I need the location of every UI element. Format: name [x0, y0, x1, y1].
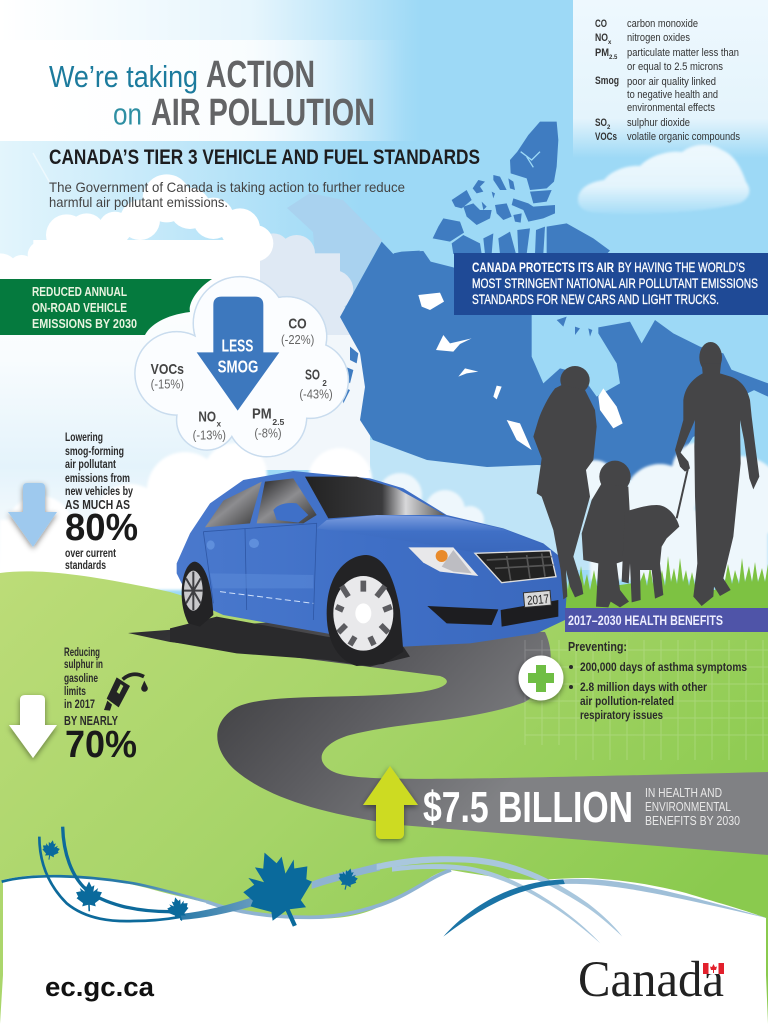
cloud: behind car and family	[0, 442, 768, 590]
panel: glossary: or equal to 2.5 microns	[627, 61, 723, 73]
car mirror	[273, 503, 308, 523]
panel: glossary: CO	[595, 18, 607, 30]
less smog arrow: SMOG	[218, 357, 258, 377]
VOCs value: (-15%)	[151, 376, 184, 391]
man	[675, 342, 759, 606]
Canada wordmark: Canada	[578, 952, 724, 1008]
car windshield	[305, 477, 445, 518]
panel: glossary: PM	[595, 47, 609, 59]
panel: glossary: volatile organic compounds	[627, 131, 740, 143]
text: reducing sulphur 70%: sulphur in	[64, 659, 103, 671]
arrow: light blue down	[8, 483, 57, 547]
translucent map: Alaska	[287, 193, 382, 318]
grass	[565, 556, 768, 610]
text: preventing list: Preventing:	[568, 639, 627, 654]
footer white wave	[0, 870, 768, 1024]
less smog arrow	[197, 297, 279, 411]
map of Canada	[340, 223, 768, 487]
banner: reduced annual emissions: EMISSIONS BY 2030	[32, 316, 137, 331]
less smog arrow: LESS	[222, 336, 253, 356]
car details	[203, 523, 317, 620]
leash	[677, 467, 688, 518]
car	[170, 471, 567, 667]
car hood	[317, 515, 547, 552]
panel: glossary: nitrogen oxides	[627, 32, 690, 44]
text: lowering emissions 80%: air pollutant	[65, 459, 116, 471]
text: lowering emissions 80%: over current	[65, 548, 116, 560]
CO value	[281, 315, 314, 347]
text: preventing list: respiratory issues	[580, 708, 663, 722]
NOx value: x	[217, 420, 222, 429]
Arctic islands	[393, 122, 558, 258]
panel: glossary: 2.5	[609, 55, 618, 61]
text: 7.5 billion benefits: $7.5 BILLION	[423, 783, 633, 832]
panel: glossary: SO	[595, 117, 607, 129]
swooshes	[2, 827, 768, 943]
panel: glossary: particulate matter less than	[627, 47, 739, 59]
intro text: The Government of Canada is taking action to further reduce	[49, 179, 405, 195]
SO2 value	[299, 366, 333, 401]
VOCs value: VOCs	[151, 361, 184, 378]
title: ACTION	[206, 54, 315, 96]
NOx value: NO	[198, 409, 216, 426]
licence plate: 2017	[527, 592, 550, 608]
banner: reduced annual emissions	[0, 279, 212, 335]
intro text	[49, 179, 405, 210]
PM2.5 value: 2.5	[272, 418, 285, 427]
car body	[177, 471, 567, 647]
car front side window	[257, 478, 317, 523]
ground	[0, 571, 768, 1024]
title	[49, 54, 375, 134]
car rear window	[205, 482, 262, 527]
text: 7.5 billion benefits: BENEFITS BY 2030	[645, 813, 740, 828]
road	[128, 620, 768, 855]
icon: green plus	[518, 656, 564, 700]
title: on	[113, 96, 142, 132]
panel: glossary	[573, 0, 768, 158]
intro text: harmful air pollutant emissions.	[49, 194, 228, 210]
woman	[533, 366, 597, 599]
pale haze on the left	[0, 266, 370, 575]
panel: Canada protects its air	[454, 253, 768, 315]
car shadow	[170, 617, 410, 667]
family silhouettes	[533, 342, 759, 607]
text: reducing sulphur 70%: gasoline	[64, 673, 98, 685]
VOCs value	[151, 361, 184, 391]
arrow: lime up	[363, 766, 418, 839]
PM2.5 value: (-8%)	[254, 426, 282, 441]
panel: glossary: Smog	[595, 75, 619, 87]
text: lowering emissions 80%: standards	[65, 560, 106, 572]
title: We’re taking	[49, 59, 198, 94]
PM2.5 value	[252, 405, 285, 441]
text: reducing sulphur 70%: BY NEARLY	[64, 713, 118, 728]
panel: glossary: NO	[595, 32, 608, 44]
panel: Canada protects its air: CANADA PROTECTS ITS AIR	[472, 260, 614, 275]
text: preventing list: air pollution-related	[580, 694, 674, 708]
smog cloud chart	[135, 277, 348, 457]
panel: glossary: x	[608, 40, 612, 46]
text: 7.5 billion benefits: IN HEALTH AND	[645, 785, 722, 800]
text: preventing list	[568, 639, 747, 722]
car headlight	[408, 547, 478, 576]
text: reducing sulphur 70%: Reducing	[64, 647, 100, 659]
car lower vents	[427, 600, 558, 627]
banner: reduced annual emissions: ON-ROAD VEHICLE	[32, 300, 127, 315]
text: preventing list: 2.8 million days with other	[580, 680, 707, 694]
text: lowering emissions 80%	[65, 432, 138, 572]
title: AIR POLLUTION	[151, 92, 375, 134]
text: 7.5 billion benefits: ENVIRONMENTAL	[645, 799, 731, 814]
banner: health benefits: 2017–2030 HEALTH BENEFITS	[568, 613, 723, 628]
panel: glossary: environmental effects	[627, 102, 715, 114]
panel: glossary: VOCs	[595, 131, 617, 143]
CO value: CO	[288, 315, 307, 332]
text: lowering emissions 80%: 80%	[65, 507, 138, 549]
panel: glossary: carbon monoxide	[627, 18, 698, 30]
CO value: (-22%)	[281, 332, 314, 347]
subtitle: CANADA’S TIER 3 VEHICLE AND FUEL STANDARDS	[49, 146, 480, 169]
panel: glossary: poor air quality linked	[627, 76, 716, 88]
website: ec.gc.ca	[45, 972, 155, 1002]
text: lowering emissions 80%: smog-forming	[65, 446, 124, 458]
maple leaves	[40, 838, 360, 939]
text: reducing sulphur 70%: 70%	[65, 724, 137, 766]
clouds behind the heading and bubble	[0, 174, 353, 363]
arrow: white down	[9, 695, 57, 758]
banner: reduced annual emissions: REDUCED ANNUAL	[32, 284, 127, 299]
girl	[582, 461, 631, 607]
PM2.5 value: PM	[252, 405, 272, 422]
cloud: top right	[578, 145, 749, 214]
text: reducing sulphur 70%: limits	[64, 686, 86, 698]
text: reducing sulphur 70%	[64, 647, 137, 766]
NOx value	[193, 409, 226, 442]
panel: glossary: to negative health and	[627, 89, 718, 101]
front wheel	[327, 555, 403, 666]
SO2 value: 2	[322, 379, 327, 388]
car grille	[475, 551, 556, 583]
panel: glossary: sulphur dioxide	[627, 117, 690, 129]
text: lowering emissions 80%: new vehicles by	[65, 486, 133, 498]
banner: health benefits	[565, 608, 768, 632]
rear wheel	[182, 562, 213, 627]
text: lowering emissions 80%: Lowering	[65, 432, 103, 444]
text: lowering emissions 80%: emissions from	[65, 473, 130, 485]
SO2 value: SO	[305, 366, 320, 383]
SO2 value: (-43%)	[299, 386, 333, 401]
NOx value: (-13%)	[193, 427, 226, 442]
text: reducing sulphur 70%: in 2017	[64, 699, 95, 711]
panel: glossary: 2	[607, 125, 611, 131]
text: lowering emissions 80%: AS MUCH AS	[65, 497, 130, 512]
dog	[622, 505, 679, 602]
icon: gas pump nozzle	[104, 674, 148, 711]
map lakes and bays	[418, 293, 623, 450]
